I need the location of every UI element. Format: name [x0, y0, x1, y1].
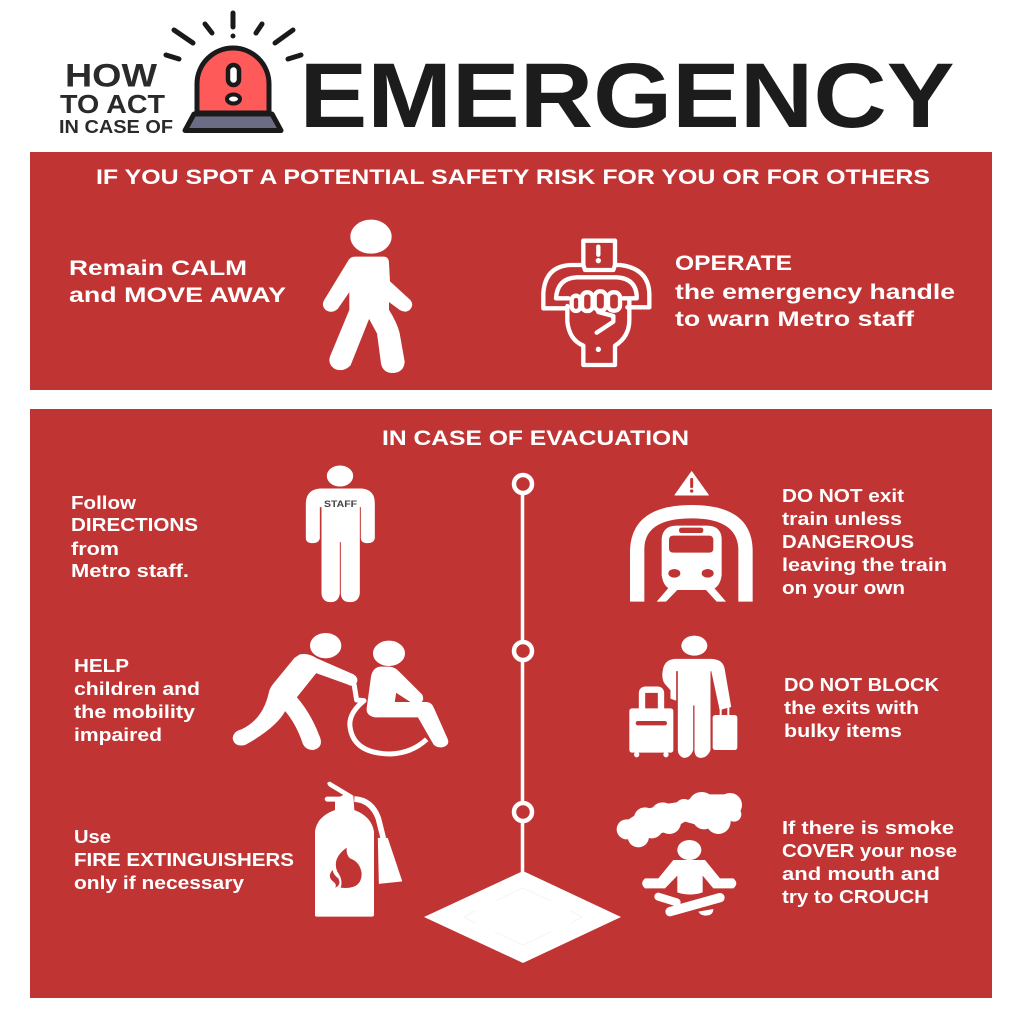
- panel heading: evacuation: IN CASE OF EVACUATION: [382, 427, 689, 450]
- icon: staff member: STAFF: [324, 499, 357, 510]
- text block: do not block exits: bulky items: [784, 721, 902, 741]
- text block: do not block exits: DO NOT BLOCK: [784, 675, 939, 695]
- text block: use fire extinguishers: only if necessary: [74, 873, 244, 893]
- text block: help children: the mobility: [74, 702, 195, 722]
- panel: safety risk: [30, 152, 992, 390]
- text block: use fire extinguishers: Use: [74, 827, 111, 847]
- title line: in case of: IN CASE OF: [59, 117, 173, 137]
- text block: follow directions: from: [71, 539, 119, 559]
- text block: cover your nose: COVER your nose: [782, 841, 957, 861]
- icon: walking person: [324, 220, 412, 372]
- text block: do not exit train: [782, 486, 947, 598]
- text block: help children: children and: [74, 679, 200, 699]
- text block: do not block exits: the exits with: [784, 698, 919, 718]
- text block: operate the emergency handle: OPERATE: [675, 252, 792, 275]
- text block: operate the emergency handle: to warn Metro staff: [675, 308, 915, 331]
- text block: cover your nose: and mouth and: [782, 864, 940, 884]
- icon: siren alarm: [166, 13, 301, 130]
- text block: help children: HELP: [74, 656, 129, 676]
- title line: emergency: EMERGENCY: [300, 45, 954, 147]
- text block: follow directions: DIRECTIONS: [71, 515, 198, 535]
- icon: person crouching under smoke: [617, 792, 742, 916]
- text block: remain calm: Remain CALM: [69, 257, 247, 280]
- icon: staff member: [306, 466, 374, 602]
- icon: person pushing wheelchair: [233, 634, 448, 754]
- text block: help children: [74, 656, 200, 745]
- icon: fire extinguisher: [315, 782, 402, 917]
- text block: do not exit train: on your own: [782, 578, 905, 598]
- text block: do not exit train: leaving the train: [782, 555, 947, 575]
- text block: follow directions: Follow: [71, 493, 137, 513]
- text block: do not exit train: DO NOT exit: [782, 486, 904, 506]
- text block: use fire extinguishers: [74, 827, 294, 893]
- text block: do not block exits: [784, 675, 939, 741]
- text block: do not exit train: DANGEROUS: [782, 532, 914, 552]
- text block: do not exit train: train unless: [782, 509, 902, 529]
- text block: operate the emergency handle: the emergency handle: [675, 281, 955, 304]
- icon: train in tunnel with warning: [630, 472, 753, 602]
- text block: cover your nose: [782, 818, 957, 907]
- text block: follow directions: [71, 493, 198, 581]
- text block: cover your nose: If there is smoke: [782, 818, 954, 838]
- icon: person with luggage: [629, 636, 737, 757]
- text block: cover your nose: try to CROUCH: [782, 887, 929, 907]
- text block: follow directions: Metro staff.: [71, 561, 189, 581]
- title line: how: HOW: [65, 58, 158, 94]
- text block: use fire extinguishers: FIRE EXTINGUISHERS: [74, 850, 294, 870]
- icon: hand pulling emergency handle: [543, 241, 649, 365]
- title line: to act: TO ACT: [60, 89, 165, 119]
- title: how to act in case of emergency: [59, 45, 954, 147]
- text block: remain calm: and MOVE AWAY: [69, 284, 286, 307]
- panel: in case of evacuation: [30, 409, 992, 998]
- text block: help children: impaired: [74, 725, 162, 745]
- text block: remain calm: [69, 257, 286, 307]
- timeline: vertical line with nodes and base: [424, 475, 621, 963]
- text block: operate the emergency handle: [675, 252, 955, 331]
- panel heading: safety risk: IF YOU SPOT A POTENTIAL SAFETY RISK FOR YOU OR FOR OTHERS: [96, 166, 930, 189]
